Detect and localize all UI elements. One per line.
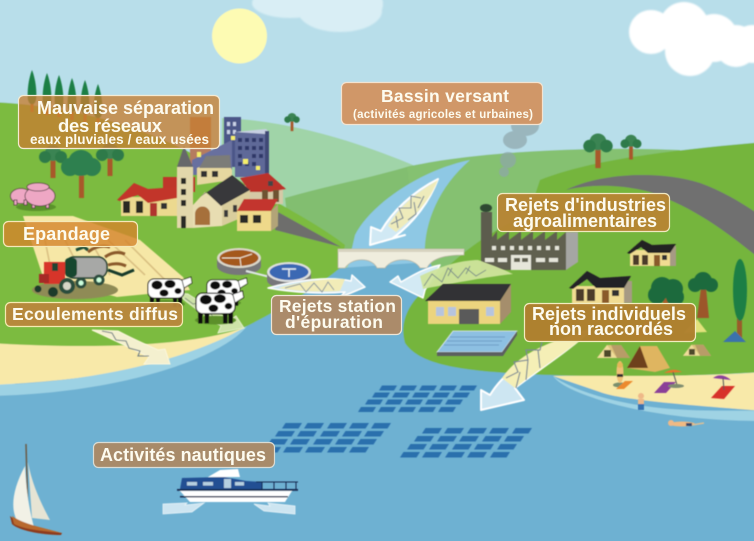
sun bbox=[212, 8, 267, 64]
label: Epandage bbox=[4, 222, 138, 246]
cloud: top centre bbox=[252, 0, 383, 32]
pollution arrow: river bbox=[370, 179, 438, 245]
town bbox=[117, 117, 286, 231]
pollution arrow: factory bbox=[390, 260, 513, 298]
trees on right hill bbox=[583, 133, 613, 168]
label: Bassin versant bbox=[342, 82, 542, 124]
pigs bbox=[10, 183, 56, 211]
label: Rejets station d'épuration: d'épuration bbox=[285, 312, 383, 332]
road bbox=[566, 175, 754, 262]
cloud: top right bbox=[629, 2, 754, 76]
back hills bbox=[220, 118, 754, 300]
field with furrows bbox=[23, 216, 190, 297]
trees, left bbox=[28, 70, 641, 198]
pollution arrow: diffuse run-off, cows bbox=[176, 293, 244, 333]
label: Mauvaise séparation des réseaux: des réseaux bbox=[58, 115, 163, 136]
trees and tents, right bank bbox=[597, 259, 747, 372]
label: Rejets d'industries agroalimentaires: agroalimentaires bbox=[513, 211, 657, 231]
label: Epandage: Epandage bbox=[23, 224, 110, 244]
aquaculture grid: right bbox=[400, 428, 532, 458]
label: Activités nautiques: Activités nautiques bbox=[100, 445, 266, 465]
aquaculture grid: left bbox=[261, 423, 391, 452]
motor boat with wake arrows bbox=[163, 469, 298, 514]
river upstream bbox=[340, 160, 470, 300]
left beach bbox=[0, 327, 245, 385]
building and storage basin by the river bbox=[425, 284, 517, 356]
label: Ecoulements diffus: Ecoulements diffus bbox=[12, 304, 178, 324]
right beach bbox=[553, 372, 754, 411]
cows bbox=[147, 277, 247, 324]
label: Rejets individuels non raccordés bbox=[524, 304, 696, 342]
label: Rejets station d'épuration: Rejets station bbox=[279, 296, 396, 316]
right bank: field bbox=[403, 188, 754, 376]
sailboat bbox=[10, 444, 62, 535]
house behind church bbox=[197, 155, 232, 185]
label: Mauvaise séparation des réseaux bbox=[18, 96, 220, 148]
pollution arrow: diffuse run-off, beach bbox=[92, 330, 170, 364]
label: Mauvaise séparation des réseaux: eaux pluviales / eaux usées bbox=[30, 132, 209, 147]
aquaculture grid: centre bbox=[358, 386, 477, 412]
label: Rejets station d'épuration bbox=[272, 296, 402, 334]
label: Rejets d'industries agroalimentaires bbox=[498, 194, 670, 232]
beach and bathers bbox=[613, 361, 735, 426]
house left, red roof bbox=[117, 177, 195, 216]
smoke bbox=[499, 106, 541, 177]
label: Rejets d'industries agroalimentaires: Rejets d'industries bbox=[505, 195, 666, 215]
label: Bassin versant: Bassin versant bbox=[381, 86, 509, 106]
road to bridge bbox=[275, 212, 341, 247]
label: Bassin versant: (activités agricoles et urbaines) bbox=[353, 109, 533, 121]
label: Rejets individuels non raccordés: Rejets individuels bbox=[532, 304, 686, 324]
tractor with slurry tank bbox=[32, 246, 134, 299]
small house front bbox=[237, 199, 278, 231]
label: Rejets individuels non raccordés: non raccordés bbox=[549, 319, 673, 339]
church bbox=[177, 146, 250, 228]
house right, red roof bbox=[240, 173, 286, 204]
pollution arrow: unconnected homes bbox=[481, 330, 590, 410]
tower blocks bbox=[190, 117, 269, 177]
pollution arrow: treatment plant bbox=[268, 275, 365, 298]
houses, right bank bbox=[569, 240, 676, 306]
factory bbox=[480, 204, 578, 270]
label: Mauvaise séparation des réseaux: Mauvaise séparation bbox=[37, 98, 214, 118]
sea and river water bbox=[0, 262, 754, 541]
left bank: field bbox=[0, 102, 345, 346]
bridge bbox=[338, 249, 464, 268]
treatment plant basins bbox=[217, 248, 311, 289]
